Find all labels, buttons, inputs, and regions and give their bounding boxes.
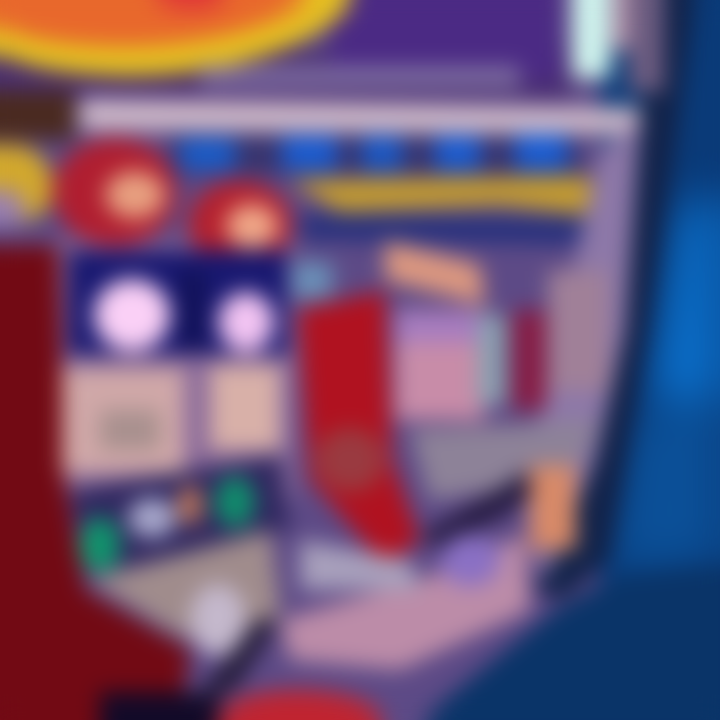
panel: lower right tray — [280, 534, 530, 670]
band: blue squares row — [170, 134, 580, 175]
panel: blue side wall — [420, 0, 720, 720]
panel: dark cabinet edge — [535, 0, 695, 600]
icon: yellow left lamp — [0, 144, 52, 227]
panel: top purple header — [0, 0, 570, 140]
panel: right machine controls — [410, 420, 600, 550]
panel: left reels area — [55, 240, 295, 500]
highlight: white and teal light — [572, 0, 664, 92]
panel: right cabinet side — [520, 120, 640, 580]
panel: top of right machine — [292, 240, 485, 305]
band: pale marquee strip — [80, 66, 640, 135]
panel: lower left tray — [90, 530, 280, 700]
panel: centre red cabinet — [298, 290, 420, 565]
sign: top yellow and red oval — [0, 0, 355, 76]
panel: dark red left cabinet — [0, 245, 385, 720]
panel: glowing reel windows — [68, 250, 288, 355]
panel: right reel window — [395, 270, 608, 420]
band: gold strip — [290, 176, 618, 245]
icon: red domes — [53, 138, 292, 268]
panel: button row — [70, 455, 290, 575]
panel: pink pay tables — [62, 365, 280, 473]
